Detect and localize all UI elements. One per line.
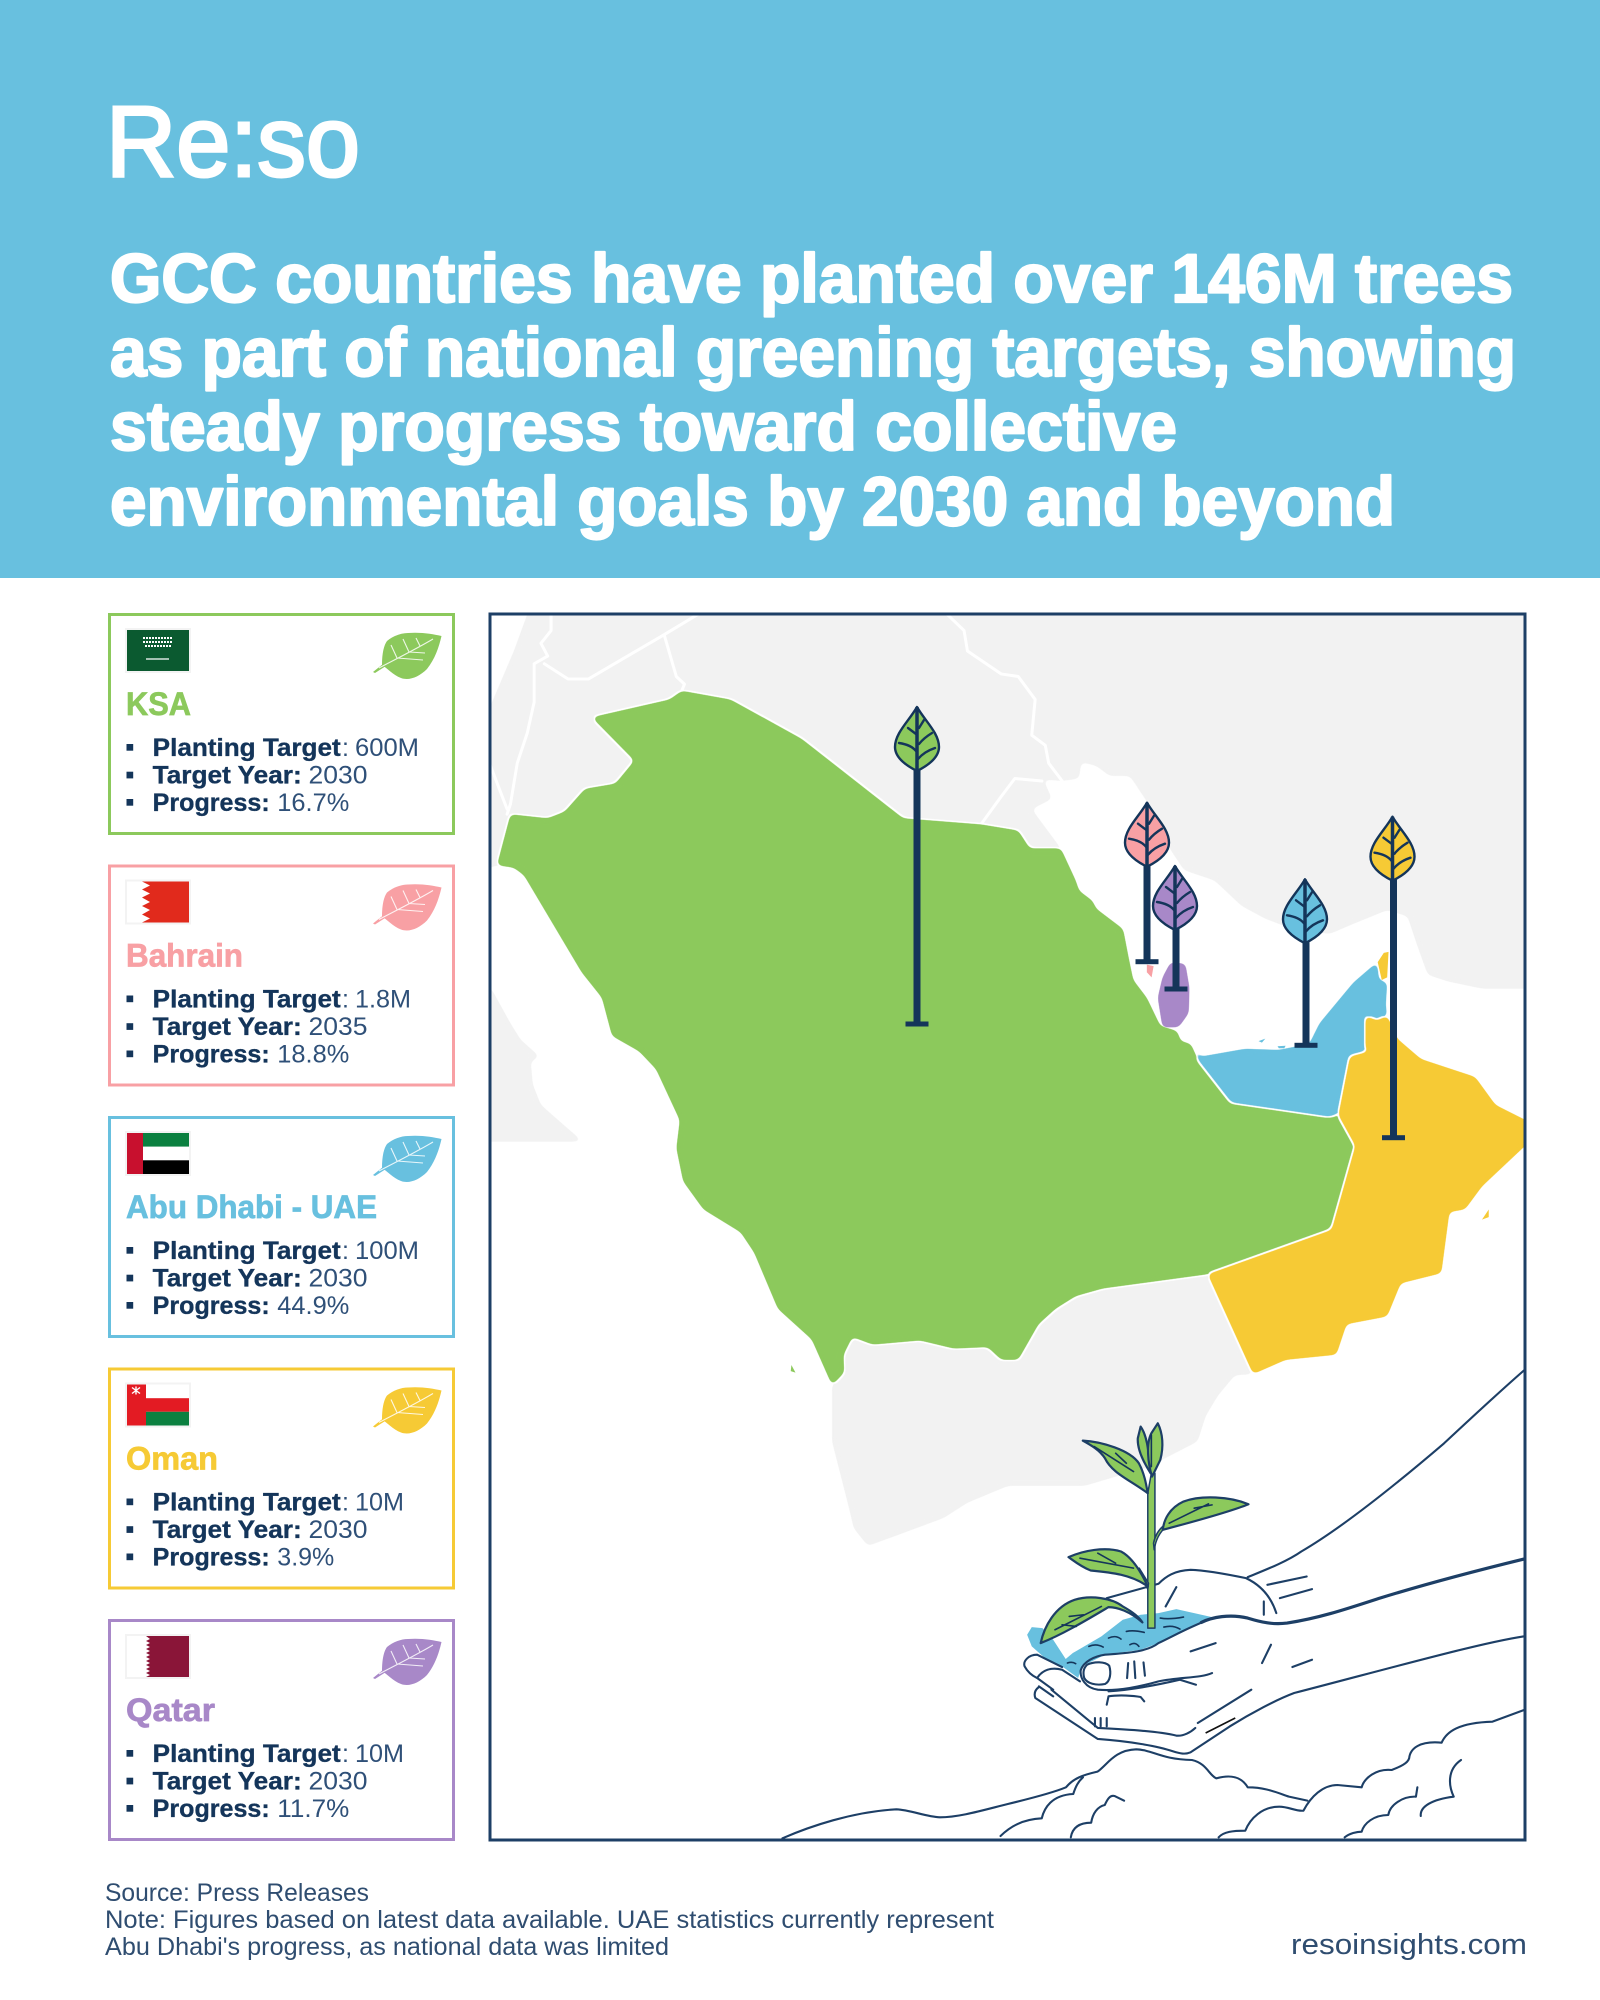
facts list: Progress:: [153, 1292, 270, 1320]
facts list: [126, 1488, 404, 1572]
country name: Abu Dhabi - UAE: [126, 1189, 377, 1225]
land: Yemen: [832, 1274, 1253, 1546]
source note: [105, 1879, 994, 1961]
facts list: 2030: [308, 762, 368, 790]
island: Red Sea: [791, 1365, 795, 1373]
land: surrounding countries north: [483, 610, 1536, 989]
country: Qatar: [1158, 962, 1189, 1027]
facts list: Target Year:: [153, 1013, 302, 1041]
facts list: Target Year:: [153, 1768, 302, 1796]
title: GCC countries have planted over 146M trees: [110, 240, 1513, 317]
marker: Qatar tree: [1153, 866, 1197, 992]
icon: leaf: [373, 1136, 442, 1182]
header band: [0, 0, 1600, 578]
facts list: Planting Target: [153, 1740, 341, 1768]
facts list: Planting Target: [153, 1237, 341, 1265]
icon: leaf: [373, 633, 442, 679]
facts list: Progress:: [153, 1040, 270, 1068]
facts list: 100M: [355, 1237, 419, 1265]
facts list: Planting Target: [153, 986, 341, 1014]
country name: Bahrain: [126, 938, 243, 974]
title: as part of national greening targets, showing: [110, 314, 1516, 391]
title: [110, 240, 1516, 540]
facts list: 2030: [308, 1768, 368, 1796]
facts list: Target Year:: [153, 1264, 302, 1292]
marker: Oman tree: [1370, 817, 1414, 1140]
marker: UAE tree: [1283, 879, 1327, 1048]
panel: Qatar: [110, 1620, 454, 1840]
facts list: :: [342, 986, 349, 1014]
facts list: Progress:: [153, 1795, 270, 1823]
seedling leaves: [1138, 1427, 1151, 1473]
flag: Bahrain: [125, 880, 191, 924]
soil: [1027, 1609, 1212, 1678]
website: resoinsights.com: [1291, 1929, 1527, 1961]
facts list: [126, 986, 411, 1068]
panel: Bahrain: [110, 866, 454, 1085]
facts list: Target Year:: [153, 762, 302, 790]
land: Egypt and Sudan: [492, 990, 578, 1142]
source note: Abu Dhabi's progress, as national data was limited: [105, 1933, 669, 1961]
facts list: :: [342, 1740, 349, 1768]
icon: leaf: [373, 884, 442, 930]
flag: Oman: [125, 1382, 191, 1428]
facts list: Planting Target: [153, 1488, 341, 1516]
country name: KSA: [126, 686, 191, 722]
seedling stem: [1148, 1473, 1155, 1628]
panel: Oman: [110, 1369, 454, 1588]
seedling veins: [1055, 1435, 1212, 1630]
facts list: :: [342, 1237, 349, 1265]
source note: Note: Figures based on latest data available. UAE statistics currently represent: [105, 1906, 994, 1934]
facts list: Target Year:: [153, 1516, 302, 1544]
panel: Abu Dhabi - UAE: [110, 1118, 454, 1336]
facts list: 600M: [355, 734, 419, 762]
seedling branches: [1138, 1526, 1164, 1590]
facts list: 2035: [308, 1013, 368, 1041]
facts list: Progress:: [153, 789, 270, 817]
title: steady progress toward collective: [110, 388, 1177, 465]
facts list: 11.7%: [277, 1795, 349, 1823]
facts list: :: [342, 1488, 349, 1516]
icon: leaf: [373, 1639, 442, 1685]
country: KSA: [497, 691, 1355, 1385]
borders: [489, 614, 1062, 824]
islands: UAE: [1259, 1039, 1286, 1048]
marker: Bahrain tree: [1125, 803, 1169, 964]
source note: Source: Press Releases: [105, 1879, 369, 1907]
country name: Qatar: [126, 1692, 215, 1728]
facts list: 10M: [355, 1488, 404, 1516]
icon: leaf: [373, 1387, 442, 1433]
ground: [782, 1710, 1524, 1838]
facts list: 10M: [355, 1740, 404, 1768]
facts list: [126, 1740, 404, 1823]
logo: Re:so: Re:so: [106, 86, 360, 198]
facts list: 3.9%: [277, 1544, 334, 1572]
map panel: [483, 610, 1536, 1840]
map frame: [490, 614, 1525, 1840]
facts list: Progress:: [153, 1544, 270, 1572]
flag: Qatar: [125, 1634, 191, 1679]
title: environmental goals by 2030 and beyond: [110, 463, 1395, 540]
facts list: [126, 1237, 419, 1320]
facts list: 2030: [308, 1264, 368, 1292]
facts list: 44.9%: [277, 1292, 349, 1320]
flag: Saudi Arabia: [125, 628, 191, 673]
soil marks: [1067, 1617, 1183, 1664]
country name: Oman: [126, 1440, 218, 1476]
country: UAE: [1191, 962, 1387, 1117]
facts list: 1.8M: [355, 986, 411, 1014]
facts list: 2030: [308, 1516, 368, 1544]
facts list: Planting Target: [153, 734, 341, 762]
arm and hand outline: [1248, 1370, 1524, 1577]
facts list: :: [342, 734, 349, 762]
marker: Saudi tree: [895, 707, 939, 1026]
facts list: [126, 734, 419, 817]
facts list: 16.7%: [277, 789, 349, 817]
illustration: hands holding seedling: [1024, 1370, 1524, 1754]
country: Bahrain: [1147, 965, 1154, 977]
country: Oman Musandam: [1378, 952, 1489, 1220]
country: Oman: [1208, 1016, 1536, 1374]
flag: UAE: [125, 1131, 191, 1176]
panel: KSA: [110, 614, 454, 834]
facts list: 18.8%: [277, 1040, 349, 1068]
